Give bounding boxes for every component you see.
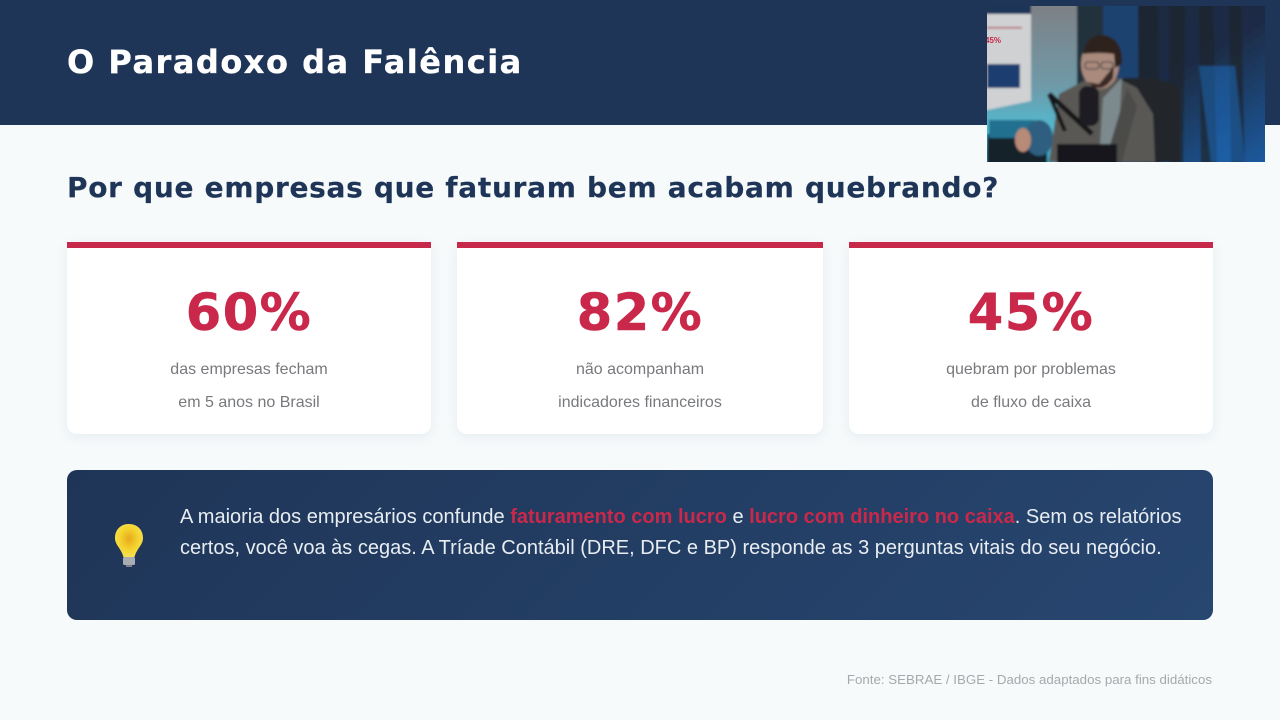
callout text: A maioria dos empresários confunde faturamento com lucro e lucro com dinheiro no caixa. Sem os relatórios	[180, 506, 1182, 528]
source note: Fonte: SEBRAE / IBGE - Dados adaptados para fins didáticos	[847, 672, 1212, 687]
stat description: quebram por problemas	[946, 361, 1116, 378]
callout text: certos, você voa às cegas. A Tríade Contábil (DRE, DFC e BP) responde as 3 perguntas vitais do seu negócio.	[180, 537, 1162, 559]
icon: light bulb	[115, 524, 143, 567]
insight callout panel	[67, 470, 1213, 620]
stat description line 2: de fluxo de caixa	[971, 394, 1091, 411]
stat number: 82%	[577, 284, 703, 343]
stat card: 60%	[67, 242, 431, 434]
webcam presenter video	[987, 6, 1265, 162]
stat description line 2: em 5 anos no Brasil	[178, 394, 320, 411]
stat card: 45%	[849, 242, 1213, 434]
stat number: 60%	[186, 284, 312, 343]
section heading: Por que empresas que faturam bem acabam quebrando?	[67, 171, 999, 204]
stat description: não acompanham	[576, 361, 704, 378]
callout text	[180, 506, 1182, 559]
stat description line 2: indicadores financeiros	[558, 394, 722, 411]
stat number: 45%	[968, 284, 1094, 343]
title: O Paradoxo da Falência	[67, 43, 523, 81]
header band	[0, 0, 1280, 125]
stat card: 82%	[457, 242, 823, 434]
stat description: das empresas fecham	[170, 361, 328, 378]
